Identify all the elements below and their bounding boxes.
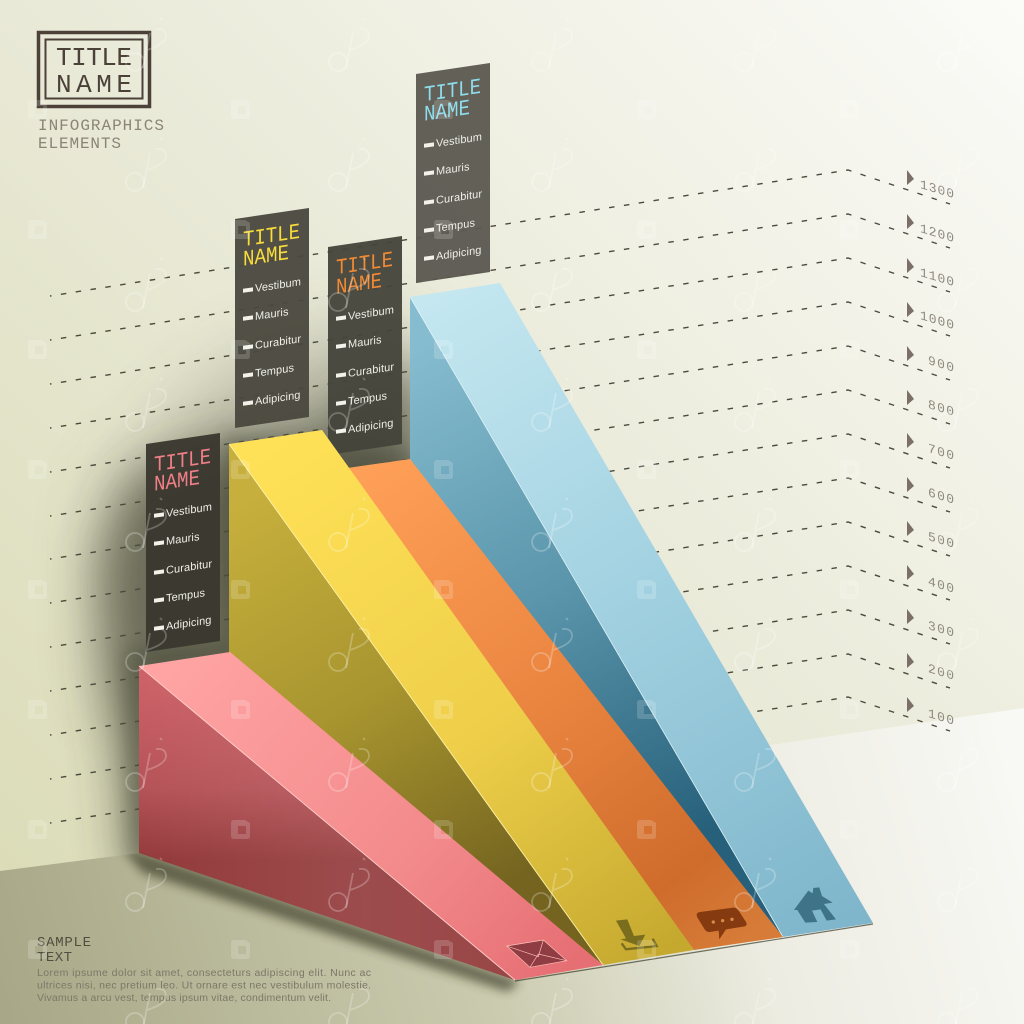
- axis value labels: 1200: [920, 221, 954, 246]
- axis markers: [907, 170, 914, 712]
- panel: yellow label: TITLE: [243, 220, 300, 253]
- floor shadow under chart: [122, 849, 520, 992]
- axis value labels: 600: [928, 485, 954, 508]
- panel: pink label: Mauris: [166, 531, 200, 548]
- wall shadow cast by chart: [98, 320, 440, 880]
- panel: orange label: [328, 236, 402, 455]
- icon: envelope: [507, 940, 567, 967]
- subtitle: [38, 117, 164, 153]
- bar: blue: [410, 283, 873, 937]
- panel: orange label: NAME: [336, 269, 382, 301]
- sample text block: TEXT: [37, 950, 72, 966]
- icon: download: [616, 919, 657, 949]
- panel: orange label: Curabitur: [348, 361, 394, 380]
- panel: pink label: Tempus: [166, 587, 205, 605]
- axis value labels: 100: [928, 706, 954, 729]
- axis value labels: [920, 177, 954, 729]
- sample text block: ultrices nisi, nec pretium leo. Ut ornare est nec vestibulum molestie.: [37, 980, 371, 992]
- panel: yellow label: [235, 208, 309, 428]
- title badge: TITLE: [56, 43, 132, 73]
- bar: pink: [139, 652, 603, 980]
- panel: orange label: Adipicing: [348, 417, 393, 436]
- axis value labels: 200: [928, 661, 954, 684]
- dashed grid lines: [50, 170, 950, 823]
- panel: blue label: Tempus: [436, 217, 475, 235]
- panel: yellow label: Curabitur: [255, 333, 301, 352]
- axis value labels: 1000: [920, 308, 954, 333]
- sample text block: Lorem ipsume dolor sit amet, consecteturs adipiscing elit. Nunc ac: [37, 967, 371, 979]
- panel: pink label: Adipicing: [166, 614, 211, 633]
- bar base edge: [515, 924, 873, 981]
- panel: blue label: Adipicing: [436, 244, 481, 263]
- panel: blue label: NAME: [424, 96, 470, 128]
- background floor: [0, 708, 1024, 1024]
- panel: yellow label: NAME: [243, 241, 289, 273]
- axis value labels: 900: [928, 353, 954, 376]
- axis value labels: 1300: [920, 177, 954, 202]
- panel: yellow label: Tempus: [255, 362, 294, 380]
- panel: blue label: [416, 63, 490, 283]
- panel: orange label: Vestibum: [348, 304, 394, 323]
- bar: yellow: [229, 430, 694, 965]
- axis value labels: 1100: [920, 265, 954, 290]
- axis value labels: 700: [928, 441, 954, 464]
- sample text block: [37, 935, 371, 1004]
- panel: pink label: [146, 433, 220, 652]
- panel: blue label: TITLE: [424, 75, 481, 108]
- subtitle: INFOGRAPHICS: [38, 117, 164, 135]
- panel: yellow label: Mauris: [255, 306, 289, 323]
- panel: yellow label: Adipicing: [255, 389, 300, 408]
- axis value labels: 800: [928, 397, 954, 420]
- panel: orange label: Mauris: [348, 334, 382, 351]
- panel: blue label: Vestibum: [436, 131, 482, 150]
- panel: blue label: Mauris: [436, 161, 470, 178]
- title badge: [38, 32, 150, 106]
- panel: yellow label: Vestibum: [255, 276, 301, 295]
- panel: pink label: NAME: [154, 466, 200, 498]
- axis value labels: 300: [928, 618, 954, 641]
- panel: pink label: Curabitur: [166, 558, 212, 577]
- title badge: NAME: [56, 70, 132, 100]
- sample text block: Vivamus a arcu vest, tempus ipsum vitae, condimentum velit.: [37, 992, 331, 1004]
- axis value labels: 500: [928, 529, 954, 552]
- panel: pink label: Vestibum: [166, 501, 212, 520]
- sample text block: SAMPLE: [37, 935, 91, 951]
- panel: orange label: TITLE: [336, 248, 393, 281]
- bar: orange: [320, 459, 783, 950]
- subtitle: ELEMENTS: [38, 135, 121, 153]
- axis value labels: 400: [928, 574, 954, 597]
- icon: speech bubble: [697, 908, 747, 939]
- icon: house: [794, 887, 836, 923]
- panel: pink label: TITLE: [154, 445, 211, 478]
- panel: orange label: Tempus: [348, 390, 387, 408]
- panel: blue label: Curabitur: [436, 188, 482, 207]
